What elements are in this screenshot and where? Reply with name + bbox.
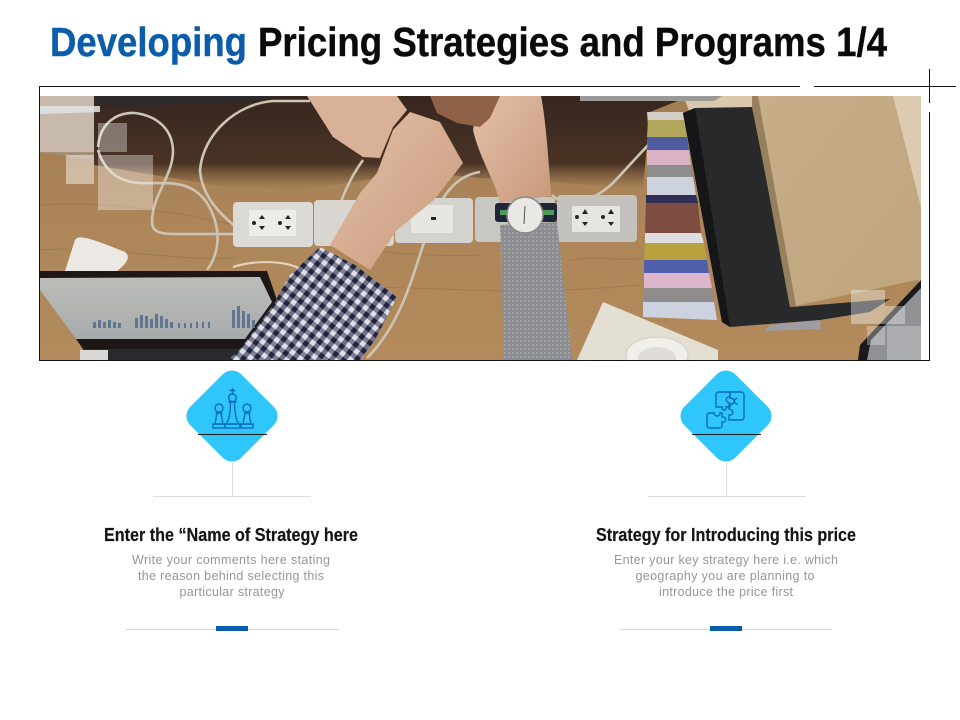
striped book stack bbox=[643, 112, 717, 320]
panel: introducing the price bbox=[596, 365, 856, 631]
middle hand bbox=[430, 96, 500, 127]
accent rule bbox=[126, 626, 339, 631]
heading: Enter the “Name of Strategy here bbox=[104, 524, 358, 545]
notebook and saucer bbox=[577, 302, 718, 360]
checked shirt sleeve bbox=[228, 247, 397, 360]
body text: particular strategy bbox=[180, 585, 285, 599]
body text: the reason behind selecting this bbox=[138, 569, 324, 583]
title: Pricing Strategies and Programs 1/4 bbox=[258, 19, 887, 65]
body text: geography you are planning to bbox=[636, 569, 815, 583]
title bbox=[50, 19, 887, 65]
title: Developing bbox=[50, 19, 247, 65]
body text: Enter your key strategy here i.e. which bbox=[614, 553, 838, 567]
black binder bbox=[683, 107, 890, 327]
body text: introduce the price first bbox=[659, 585, 794, 599]
diamond badge: puzzle icon bbox=[675, 365, 777, 467]
body text: Write your comments here stating bbox=[132, 553, 330, 567]
left arm and fist bbox=[330, 112, 463, 270]
photo: teamwork fist bump on a wooden desk bbox=[40, 96, 921, 373]
wood grain bbox=[40, 204, 645, 291]
laptop with chart bbox=[40, 271, 277, 360]
body text bbox=[614, 553, 838, 599]
grey forearm and sleeve bbox=[500, 222, 572, 360]
cables bbox=[98, 101, 683, 358]
icon: chess pieces bbox=[213, 388, 253, 428]
diamond badge: chess icon bbox=[181, 365, 283, 467]
light top right corner bbox=[893, 96, 921, 282]
heading: Strategy for Introducing this price bbox=[596, 524, 856, 545]
photo frame with crosshair bbox=[40, 69, 956, 360]
wrist watch bbox=[495, 197, 557, 233]
dark shadow area on the desk bbox=[94, 96, 690, 190]
right hand bbox=[473, 96, 551, 203]
laptop corner bottom right bbox=[858, 280, 921, 360]
connector bbox=[648, 461, 806, 496]
laptop at top bbox=[94, 96, 277, 106]
body text bbox=[132, 553, 330, 599]
panel: name of strategy bbox=[104, 365, 358, 631]
top left hand bbox=[307, 96, 407, 158]
accent rule bbox=[620, 626, 832, 631]
icon: puzzle pieces bbox=[707, 392, 744, 428]
tan folder bbox=[752, 96, 921, 307]
outlet strip bbox=[233, 195, 637, 247]
translucent squares bbox=[40, 96, 921, 360]
connector bbox=[153, 461, 311, 496]
power bank bbox=[65, 237, 128, 271]
